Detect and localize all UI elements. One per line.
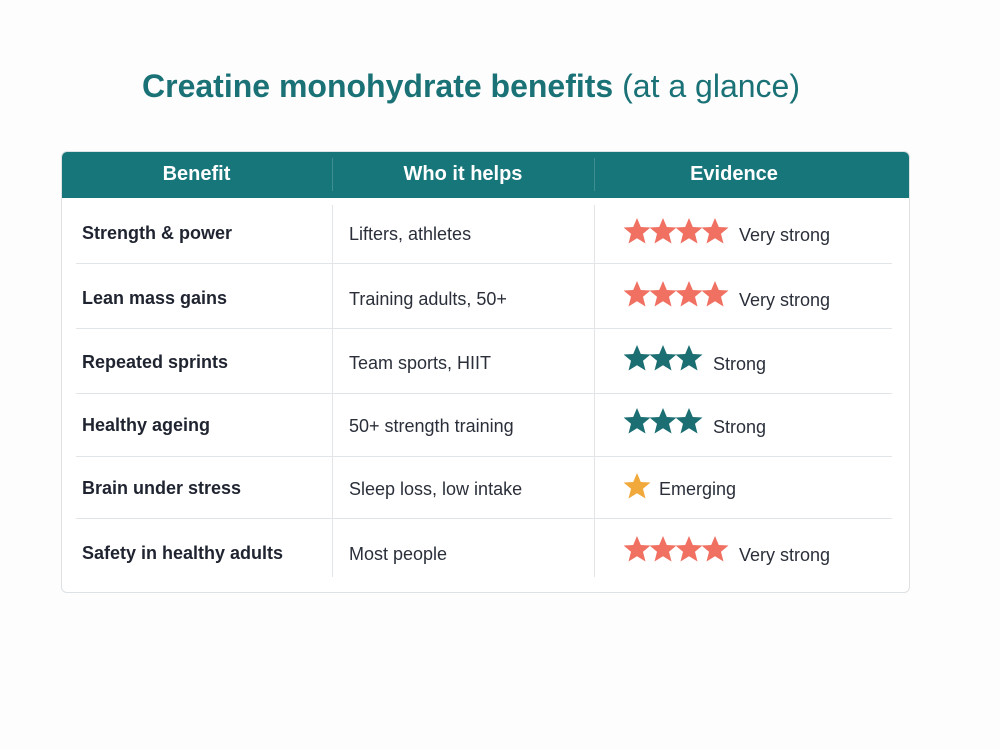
row 3: Team sports, HIIT <box>349 353 491 373</box>
row 6 <box>82 536 830 565</box>
row 4: Healthy ageing <box>82 415 210 435</box>
row 2: Lean mass gains <box>82 288 227 308</box>
row 4 <box>82 408 766 437</box>
header: Who it helps: Who it helps <box>404 163 522 185</box>
row 6: Safety in healthy adults <box>82 543 283 563</box>
stars coral 4 <box>624 218 728 244</box>
row 1: Very strong <box>739 225 830 245</box>
table panel <box>61 151 910 593</box>
row 6: Most people <box>349 544 447 564</box>
row 6: Very strong <box>739 545 830 565</box>
header row <box>62 152 909 198</box>
row 5 <box>82 473 736 499</box>
star gold 1 <box>624 473 650 498</box>
row 4: 50+ strength training <box>349 416 514 436</box>
row 5: Brain under stress <box>82 478 241 498</box>
stars teal 3 <box>624 345 702 370</box>
row 5: Sleep loss, low intake <box>349 479 522 499</box>
stars coral 4 <box>624 281 728 306</box>
header: Benefit: Benefit <box>163 163 230 185</box>
row 4: Strong <box>713 417 766 437</box>
row 3: Strong <box>713 354 766 374</box>
header: Evidence: Evidence <box>690 163 778 185</box>
row 2: Training adults, 50+ <box>349 289 507 309</box>
row 2: Very strong <box>739 290 830 310</box>
row 3 <box>82 345 766 374</box>
stars coral 4 <box>624 536 728 562</box>
stars teal 3 <box>624 408 702 434</box>
row 1 <box>82 218 830 245</box>
row 2 <box>82 281 830 310</box>
row 3: Repeated sprints <box>82 352 228 372</box>
row 5: Emerging <box>659 479 736 499</box>
row 1: Strength & power <box>82 223 232 243</box>
title: Creatine monohydrate benefits (at a glance) <box>142 68 800 104</box>
row 1: Lifters, athletes <box>349 224 471 244</box>
